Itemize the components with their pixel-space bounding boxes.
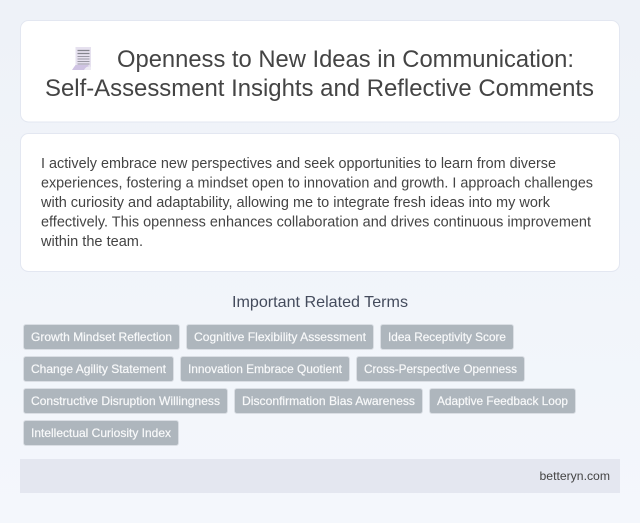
chip: Adaptive Feedback Loop (430, 388, 576, 414)
statement text: within the team. (40, 234, 143, 250)
chip: Growth Mindset Reflection (24, 324, 180, 350)
chip: Disconfirmation Bias Awareness (234, 388, 422, 414)
chip: Change Agility Statement (24, 356, 174, 382)
chip: Idea Receptivity Score (380, 324, 514, 350)
statement text: experiences, fostering a mindset open to innovation and growth. I approach challenges (41, 176, 593, 192)
chip: Idea Receptivity Score: Idea Receptivity Score (388, 330, 506, 344)
footer bar (20, 459, 620, 493)
title text: Openness to New Ideas in Communication: (117, 46, 574, 73)
chip: Adaptive Feedback Loop: Adaptive Feedback Loop (437, 394, 568, 408)
chip: Change Agility Statement: Change Agility Statement (31, 362, 167, 376)
heading: important related terms: Important Related Terms (232, 294, 408, 311)
statement text: I actively embrace new perspectives and seek opportunities to learn from diverse (41, 156, 556, 172)
footer text: betteryn.com (540, 469, 610, 483)
statement text: with curiosity and adaptability, allowing me to integrate fresh ideas into my work (40, 195, 551, 211)
chip: Cognitive Flexibility Assessment: Cognitive Flexibility Assessment (194, 330, 367, 344)
title text (45, 46, 594, 102)
chip: Disconfirmation Bias Awareness: Disconfirmation Bias Awareness (242, 394, 415, 408)
chip: Cross-Perspective Openness (356, 356, 524, 382)
chip: Innovation Embrace Quotient: Innovation Embrace Quotient (188, 362, 343, 376)
chip: Cognitive Flexibility Assessment (186, 324, 374, 350)
chip: Cross-Perspective Openness: Cross-Perspective Openness (364, 362, 517, 376)
title text: Self-Assessment Insights and Reflective Comments (45, 75, 594, 102)
statement text (40, 156, 593, 250)
chip: Growth Mindset Reflection: Growth Mindset Reflection (31, 330, 172, 344)
chip: Innovation Embrace Quotient (180, 356, 350, 382)
chip: Intellectual Curiosity Index (24, 420, 178, 446)
chip: Intellectual Curiosity Index: Intellectual Curiosity Index (31, 426, 171, 440)
panel: title card (20, 20, 620, 122)
statement text: effectively. This openness enhances collaboration and drives continuous improvement (41, 214, 591, 230)
panel: reflective statement (20, 134, 620, 272)
chip group: related terms (24, 324, 576, 446)
icon: paper scroll (72, 47, 91, 70)
chip: Constructive Disruption Willingness (24, 388, 228, 414)
chip: Constructive Disruption Willingness: Constructive Disruption Willingness (31, 394, 220, 408)
